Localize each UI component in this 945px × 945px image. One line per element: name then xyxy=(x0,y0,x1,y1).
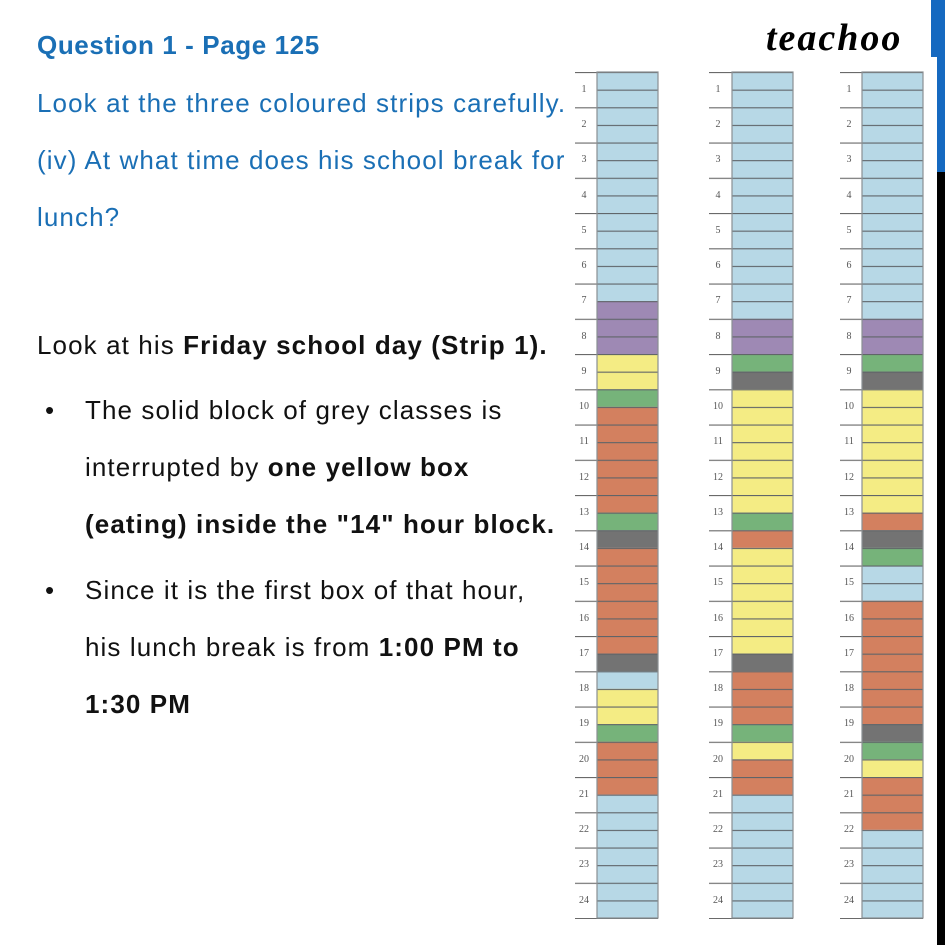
strip 2: 6 xyxy=(716,260,720,271)
strip 1: 4 xyxy=(582,190,586,201)
question text: Look at the three coloured strips carefully. xyxy=(37,88,566,118)
strip 2: 24 xyxy=(713,895,723,906)
strip 3: 8 xyxy=(846,331,852,342)
strip 3: 7 xyxy=(846,295,852,306)
strip 3: 16 xyxy=(844,613,854,624)
strip 1: 22 xyxy=(579,824,589,835)
strip 2: 2 xyxy=(716,119,720,130)
strip 3: 15 xyxy=(844,577,854,588)
strip 2: 17 xyxy=(713,648,723,659)
strip 3: 10 xyxy=(844,401,854,412)
strip 2: 15 xyxy=(713,577,723,588)
strip 2: 22 xyxy=(713,824,723,835)
bullet 2: his lunch break is from 1:00 PM to xyxy=(85,632,520,662)
strip 2: 11 xyxy=(713,436,723,447)
strip 2: 8 xyxy=(716,331,720,342)
strip 2: 7 xyxy=(716,295,720,306)
strip 3: 21 xyxy=(844,789,854,800)
strip 3: 3 xyxy=(846,154,852,165)
strip 2: 13 xyxy=(713,507,723,518)
title: Question 1 - Page 125 xyxy=(37,30,320,60)
strip 2 xyxy=(709,72,793,919)
strip 3: 17 xyxy=(844,648,854,659)
strip 1: 8 xyxy=(582,331,586,342)
strip 1: 13 xyxy=(579,507,589,518)
strip 1 xyxy=(575,72,658,919)
bullet 2 xyxy=(45,575,525,719)
strip 1: 17 xyxy=(579,648,589,659)
bullet 1: interrupted by one yellow box xyxy=(85,452,470,482)
answer intro: Look at his Friday school day (Strip 1). xyxy=(37,330,548,360)
strip 1: 16 xyxy=(579,613,589,624)
bullet 1 xyxy=(45,395,555,539)
strip 1: 19 xyxy=(579,718,589,729)
strip 1: 15 xyxy=(579,577,589,588)
strip 1: 9 xyxy=(582,366,586,377)
strip 1: 10 xyxy=(579,401,589,412)
strip 3: 4 xyxy=(846,190,852,201)
strip 2: 21 xyxy=(713,789,723,800)
question text: lunch? xyxy=(37,202,120,232)
strip 2: 9 xyxy=(716,366,720,377)
strip 2: 5 xyxy=(716,225,720,236)
question text: (iv) At what time does his school break for xyxy=(37,145,566,175)
strip 1: 3 xyxy=(582,154,586,165)
bullet 1: (eating) inside the "14" hour block. xyxy=(85,509,555,539)
strip 1: 21 xyxy=(579,789,589,800)
question text xyxy=(37,88,566,232)
strip 1: 7 xyxy=(582,295,586,306)
strip 1: 24 xyxy=(579,895,589,906)
strip 1: 18 xyxy=(579,683,589,694)
strip 2: 12 xyxy=(713,472,723,483)
strip 2: 19 xyxy=(713,718,723,729)
strip 3 xyxy=(840,72,923,919)
strip 2: 23 xyxy=(713,859,723,870)
strip 3: 14 xyxy=(844,542,854,553)
strip 1: 14 xyxy=(579,542,589,553)
bullet 1: • xyxy=(45,395,55,425)
bullet 2: Since it is the first box of that hour, xyxy=(85,575,525,605)
strip 2: 4 xyxy=(716,190,720,201)
strip 3: 12 xyxy=(844,472,854,483)
strip 3: 22 xyxy=(844,824,854,835)
bullet 1: The solid block of grey classes is xyxy=(85,395,502,425)
strip 2: 3 xyxy=(716,154,720,165)
strip 3: 19 xyxy=(844,718,854,729)
bullet 2: 1:30 PM xyxy=(85,689,191,719)
strip 1: 2 xyxy=(582,119,586,130)
strip 3: 6 xyxy=(846,260,852,271)
strip 1: 23 xyxy=(579,859,589,870)
side bars xyxy=(931,0,945,945)
strip 2: 10 xyxy=(713,401,723,412)
strip 3: 24 xyxy=(844,895,854,906)
strip 3: 9 xyxy=(846,366,852,377)
strip 3: 18 xyxy=(844,683,854,694)
strip 1: 1 xyxy=(582,84,586,95)
strip 1: 11 xyxy=(579,436,589,447)
strip 1: 20 xyxy=(579,754,589,765)
strip 1: 5 xyxy=(582,225,586,236)
logo: teachoo xyxy=(766,17,902,59)
strip 3: 11 xyxy=(844,436,854,447)
strip 3: 13 xyxy=(844,507,854,518)
strip 2: 16 xyxy=(713,613,723,624)
strip 1: 12 xyxy=(579,472,589,483)
strip 1: 6 xyxy=(582,260,586,271)
strip 2: 14 xyxy=(713,542,723,553)
bullet 2: • xyxy=(45,575,55,605)
strip 2: 1 xyxy=(716,84,720,95)
strip 3: 1 xyxy=(846,84,852,95)
strip 2: 20 xyxy=(713,754,723,765)
strip 3: 5 xyxy=(846,225,852,236)
strip 3: 23 xyxy=(844,859,854,870)
strip 2: 18 xyxy=(713,683,723,694)
strip 3: 2 xyxy=(846,119,852,130)
strip 3: 20 xyxy=(844,754,854,765)
